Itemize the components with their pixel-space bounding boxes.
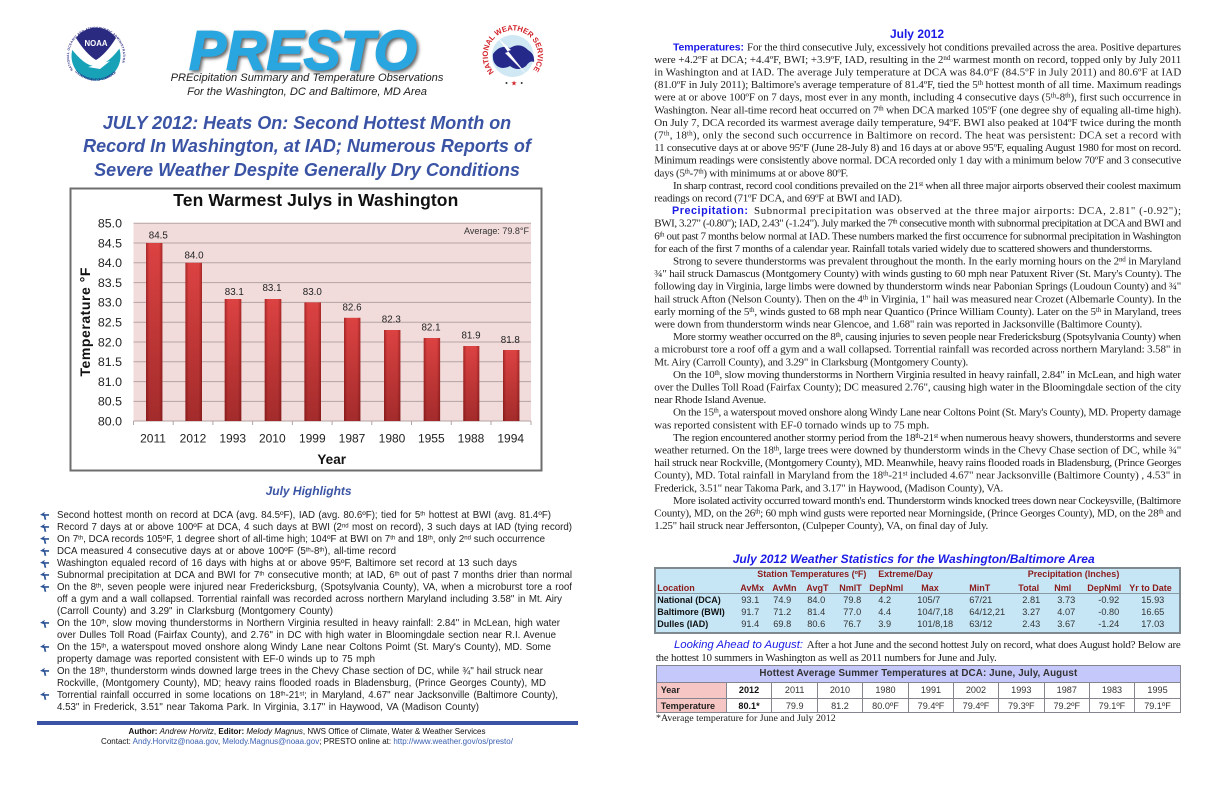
table: July 2012 weather statistics: -1.24 bbox=[1098, 619, 1119, 629]
heading: weather statistics: July 2012 Weather Statistics for the Washington/Baltimore Area bbox=[733, 552, 1095, 566]
table: hottest average summer temperatures: 1991 bbox=[921, 685, 941, 695]
x axis labels bbox=[140, 432, 524, 446]
table: July 2012 weather statistics: 79.8 bbox=[843, 595, 861, 605]
value labels: 83.0 bbox=[303, 287, 322, 298]
narrative: precipitation: Mt. Airy (Carroll County), and 3.29" in Clarksburg (Montgomery County). bbox=[654, 356, 969, 368]
table: July 2012 weather statistics: Baltimore (BWI) bbox=[657, 607, 725, 617]
text: looking ahead to August: After a hot June and the second hottest July on record, what does August hold? Below are bbox=[807, 639, 1181, 651]
highlights list: On the 10th, slow moving thunderstorms in Northern Virginia resulted in heavy rainfall: 2.84" in McLean, high water bbox=[57, 618, 560, 629]
narrative: precipitation: On the 10th, slow moving thunderstorms in Northern Virginia resulted in heavy rainfall, 2.84" in McLean, and high water bbox=[673, 369, 1181, 381]
table: hottest average summer temperatures: 1983 bbox=[1102, 685, 1122, 695]
highlights list: 4.53" in Frederick, 3.51" near Takoma Park. In Virginia, 3.17" in Haywood, VA (Madison County) bbox=[57, 702, 479, 713]
text: looking ahead to August: Looking Ahead to August: bbox=[674, 639, 803, 651]
table: hottest average summer temperatures: Hottest Average Summer Temperatures at DCA: June, July, August bbox=[759, 668, 1077, 679]
footer rule bbox=[37, 721, 578, 725]
x axis labels: 2012 bbox=[180, 432, 207, 446]
table: July 2012 weather statistics: Location bbox=[657, 583, 695, 593]
highlights list: On 7th, DCA records 105ºF, 1 degree short of all-time high; 104ºF at BWI on 7th and 18th, only 2nd such occurrence bbox=[57, 534, 545, 545]
highlights list: Record 7 days at or above 100ºF at DCA, 4 such days at BWI (2nd most on record), 3 such days at IAD (tying record) bbox=[57, 522, 572, 533]
narrative: temperatures: (81.0ºF in July 2011); Baltimore's average temperature of 81.4ºF, tied the 5th hottest month of all time. Maximum readings bbox=[654, 79, 1181, 91]
table: hottest average summer temperatures: 1980 bbox=[875, 685, 896, 695]
table: hottest average summer temperatures: 79.2ºF bbox=[1053, 701, 1080, 711]
average note: Average: 79.8°F bbox=[464, 226, 529, 236]
table: July 2012 weather statistics: 2.43 bbox=[1022, 619, 1040, 629]
table: July 2012 weather statistics: 67/21 bbox=[969, 595, 992, 605]
highlights list: Second hottest month on record at DCA (avg. 84.5ºF), IAD (avg. 80.6ºF); tied for 5th hottest at BWI (avg. 81.4ºF) bbox=[57, 510, 551, 521]
table: hottest average summer temperatures: Year bbox=[661, 685, 680, 695]
icon: NOAA logo: NOAA bbox=[85, 39, 108, 48]
narrative: precipitation bbox=[654, 205, 1182, 532]
heading: July 2012: July 2012 bbox=[890, 27, 944, 41]
table: July 2012 weather statistics: Max bbox=[921, 583, 939, 593]
narrative: precipitation: for each of the first 7 months of a calendar year. Rainfall totals varied widely due to scattered showers and thunderstorms. bbox=[654, 243, 1153, 255]
narrative: temperatures: Minimum readings were consistently above normal. DCA recorded only 1 day with a minimum below 70ºF and 3 consecutive bbox=[654, 155, 1181, 167]
table: July 2012 weather statistics: -0.92 bbox=[1098, 595, 1119, 605]
x axis labels: 1994 bbox=[497, 432, 524, 446]
narrative: temperatures: Temperatures: bbox=[673, 41, 744, 53]
table: hottest average summer temperatures: 2002 bbox=[966, 685, 986, 695]
table: hottest average summer temperatures bbox=[656, 665, 1181, 713]
y axis labels bbox=[98, 216, 122, 428]
table: July 2012 weather statistics: -0.80 bbox=[1098, 607, 1119, 617]
highlights list: property damage was reported consistent with EF-0 winds up to 75 mph bbox=[57, 654, 375, 665]
table: hottest average summer temperatures: 1993 bbox=[1011, 685, 1031, 695]
narrative: temperatures: On July 7, DCA recorded its warmest average daily temperature, 94ºF. BWI also peaked at 104ºF twice during the month bbox=[654, 117, 1182, 129]
table: hottest average summer temperatures: 1987 bbox=[1057, 685, 1077, 695]
table: July 2012 weather statistics: DepNml bbox=[869, 583, 903, 593]
narrative: precipitation: over the Dulles Toll Road (Fairfax County); DC measured 2.76", causing high water in the Bloomingdale section of the city bbox=[654, 382, 1182, 394]
narrative: precipitation: BWI, 3.27" (-0.80"); IAD, 2.43" (-1.24"). July marked the 7th consecutive month with subnormal precipitation at DCA and BWI and bbox=[654, 218, 1182, 230]
icon: National Weather Service logo: ★ bbox=[511, 80, 517, 88]
x axis title: Year bbox=[317, 452, 347, 467]
narrative: precipitation: Strong to severe thunderstorms was prevalent throughout the month. In the early morning hours on the 2nd in Maryland bbox=[673, 256, 1182, 268]
value labels: 81.9 bbox=[461, 330, 481, 342]
table: July 2012 weather statistics: NmlT bbox=[839, 583, 862, 593]
y axis labels: 83.0 bbox=[98, 296, 122, 310]
narrative: temperatures: readings on record (71ºF DCA, and 69ºF at BWI and IAD). bbox=[654, 192, 903, 204]
subtitle: PREcipitation Summary and Temperature Observations bbox=[171, 72, 443, 84]
icon: NOAA logo: U.S. DEPARTMENT OF COMMERCE bbox=[75, 70, 116, 81]
value labels: 83.1 bbox=[225, 287, 244, 298]
subtitle: For the Washington, DC and Baltimore, MD Area bbox=[187, 86, 427, 98]
table: hottest average summer temperatures: 79.1ºF bbox=[1144, 701, 1171, 711]
table: July 2012 weather statistics: 80.6 bbox=[807, 619, 825, 629]
value labels: 82.3 bbox=[382, 314, 401, 326]
highlights list: Subnormal precipitation at DCA and BWI for 7th consecutive month; at IAD, 6th out of past 7 months drier than normal bbox=[57, 570, 572, 581]
x axis labels: 1999 bbox=[299, 432, 326, 446]
narrative: precipitation: On the 15th, a waterspout moved onshore along Windy Lane near Coltons Point (St. Mary's County), MD. Property damage bbox=[673, 407, 1181, 419]
narrative: precipitation: Subnormal precipitation was observed at the three major airports: DCA, 2.81" (-0.92"); bbox=[754, 205, 1181, 217]
narrative text column bbox=[654, 41, 1182, 532]
table: July 2012 weather statistics: Precipitation (Inches) bbox=[1028, 569, 1119, 579]
narrative: temperatures: (7th, 18th), only the second such occurrence in Baltimore on record. The heat was persistent: DCA set a record with bbox=[654, 130, 1182, 142]
table: July 2012 weather statistics: 15.93 bbox=[1141, 595, 1164, 605]
narrative: precipitation: hail struck Afton (Nelson County). Then on the 4th in Virginia, 1" hail was measured near Crozet (Albemarle County). In the bbox=[654, 293, 1181, 305]
table: July 2012 weather statistics: 3.9 bbox=[878, 619, 891, 629]
table: July 2012 weather statistics: 3.73 bbox=[1057, 595, 1075, 605]
footer credits: Author: Andrew Horvitz, Editor: Melody Magnus, NWS Office of Climate, Water & Weather Services bbox=[129, 726, 485, 736]
y axis labels: 82.0 bbox=[98, 335, 122, 349]
table: July 2012 weather statistics: AvMx bbox=[740, 583, 764, 593]
heading: July Highlights: July Highlights bbox=[266, 484, 352, 498]
table: July 2012 weather statistics: 4.4 bbox=[878, 607, 891, 617]
value labels: 84.0 bbox=[184, 250, 204, 262]
highlights list: Washington equaled record of 16 days with highs at or above 95ºF, Baltimore set record at 13 such days bbox=[57, 558, 517, 569]
table: July 2012 weather statistics: 105/7 bbox=[917, 595, 940, 605]
x axis labels: 2010 bbox=[259, 432, 286, 446]
table: hottest average summer temperatures: 81.2 bbox=[831, 701, 849, 711]
narrative: precipitation: 6th out past 7 months below normal at IAD. These numbers marked the first occurrence for subnormal precipitation in Washington bbox=[654, 230, 1182, 242]
table: July 2012 weather statistics: 64/12,21 bbox=[969, 607, 1005, 617]
narrative: precipitation: Frederick, 3.51" near Takoma Park, and 3.17" in Haywood, (Madison County), VA. bbox=[654, 482, 1004, 494]
narrative: temperatures: were +4.2ºF at DCA; +4.4ºF, BWI; +3.9ºF, IAD, resulting in the 2nd warmest month on record, topped only by July 2011 bbox=[654, 54, 1181, 66]
x axis labels: 1987 bbox=[339, 432, 366, 446]
y axis labels: 80.0 bbox=[98, 414, 122, 428]
footer credits: Contact: Andy.Horvitz@noaa.gov, Melody.Magnus@noaa.gov; PRESTO online at: http://www.weather.gov/os/presto/ bbox=[101, 737, 513, 746]
value labels bbox=[149, 230, 520, 346]
bar chart: ten warmest Julys in Washington bbox=[70, 188, 542, 472]
x axis labels: 1993 bbox=[219, 432, 246, 446]
narrative: precipitation: County), MD. Total rainfall in Maryland from the 18th-21st included 4.67" near Jacksonville (Baltimore County) , 4.53" in bbox=[654, 470, 1182, 482]
title: Severe Weather Despite Generally Dry Conditions bbox=[94, 160, 520, 180]
table: July 2012 weather statistics: 63/12 bbox=[969, 619, 992, 629]
narrative: precipitation: More stormy weather occurred on the 8th, causing injuries to seven people near Fredericksburg (Spotsylvania County) when bbox=[673, 331, 1182, 343]
highlights list bbox=[40, 510, 572, 713]
highlights list: (Carroll County) and 3.29" in Clarksburg (Montgomery County) bbox=[57, 606, 333, 617]
x axis labels: 1988 bbox=[458, 432, 485, 446]
table: July 2012 weather statistics: 74.9 bbox=[773, 595, 791, 605]
x axis labels: 1955 bbox=[418, 432, 445, 446]
highlights list: On the 15th, a waterspout moved onshore along Windy Lane near Coltons Poimt (St. Mary's County), MD. Some bbox=[57, 642, 551, 653]
narrative: temperatures: 11 consecutive days at or above 95ºF (June 28-July 8) and 16 days at or above 95ºF, equaling August 1980 for most on record. bbox=[654, 142, 1182, 154]
table: July 2012 weather statistics: 3.67 bbox=[1057, 619, 1075, 629]
narrative: temperatures: Washington. Near all-time record heat occurred on 7th when DCA marked 105ºF (one degree shy of equaling all-time high). bbox=[654, 104, 1182, 116]
title bbox=[83, 113, 532, 180]
table: July 2012 weather statistics: MinT bbox=[969, 583, 990, 593]
highlights list: Rockville, (Montgomery County), MD; heavy rains flooded roads in Bladensburg, (Prince Georges County), MD bbox=[57, 678, 546, 689]
y axis labels: 85.0 bbox=[98, 216, 122, 230]
narrative: temperatures: For the third consecutive July, excessively hot conditions prevailed across the area. Positive departures bbox=[747, 41, 1181, 53]
highlights list: off a gym and a wall collapsed. Torrential rainfall was recorded across northern Maryland including 3.58" in Mt. Airy bbox=[57, 594, 562, 605]
table: July 2012 weather statistics: DepNml bbox=[1087, 583, 1121, 593]
table: July 2012 weather statistics: 16.65 bbox=[1141, 607, 1164, 617]
chart title: Ten Warmest Julys in Washington bbox=[173, 190, 458, 210]
highlights list: On the 8th, seven people were injured near Fredericksburg, (Spotsylvania County), VA, when a microburst tore a roof bbox=[57, 582, 572, 593]
y axis title: Temperature °F bbox=[77, 267, 93, 376]
y axis labels: 81.0 bbox=[98, 375, 122, 389]
table: July 2012 weather statistics: Yr to Date bbox=[1129, 583, 1172, 593]
highlights list: DCA measured 4 consecutive days at or above 100ºF (5th-8th), all-time record bbox=[57, 546, 396, 557]
title: Record In Washington, at IAD; Numerous Reports of bbox=[83, 136, 531, 156]
table: hottest average summer temperatures: 79.4ºF bbox=[963, 701, 989, 711]
table: hottest average summer temperatures: 80.0ºF bbox=[872, 701, 899, 711]
subtitle bbox=[171, 72, 444, 98]
table: hottest average summer temperatures: 2011 bbox=[785, 685, 804, 695]
table: July 2012 weather statistics: 4.2 bbox=[878, 595, 891, 605]
narrative: precipitation: The region encountered another stormy period from the 18th-21st when numerous heavy showers, thunderstorms and severe bbox=[673, 432, 1181, 444]
value labels: 84.5 bbox=[149, 230, 168, 242]
narrative: precipitation: ¾" hail struck Damascus (Montgomery County) with winds gusting to 60 mph near Patuxent River (St. Mary's County). The bbox=[654, 268, 1181, 280]
text: looking ahead to August bbox=[656, 639, 1181, 663]
narrative: temperatures bbox=[654, 41, 1182, 204]
table: hottest average summer temperatures: 80.1* bbox=[738, 701, 760, 711]
table: July 2012 weather statistics: 17.03 bbox=[1141, 619, 1164, 629]
table: July 2012 weather statistics: 71.2 bbox=[773, 607, 791, 617]
table: hottest average summer temperatures: Temperature bbox=[661, 701, 715, 711]
narrative: precipitation: Precipitation: bbox=[672, 205, 748, 217]
table: July 2012 weather statistics: 3.27 bbox=[1022, 607, 1040, 617]
table: July 2012 weather statistics: 93.1 bbox=[741, 595, 759, 605]
table: July 2012 weather statistics: 104/7,18 bbox=[917, 607, 953, 617]
table: July 2012 weather statistics: AvMn bbox=[772, 583, 796, 593]
narrative: precipitation: following day in Virginia, large limbs were downed by thunderstorm winds near Pabonian Springs (Loudoun County) and ¾" bbox=[654, 281, 1181, 293]
footer credits bbox=[101, 726, 513, 746]
table: hottest average summer temperatures: 79.1ºF bbox=[1099, 701, 1125, 711]
narrative: temperatures: were at or above 100ºF on 7 days, most ever in any month, including 4 consecutive days (5th-8th), first such occurrence in bbox=[654, 92, 1182, 104]
highlights list: Torrential rainfall occurred in some locations on 18th-21st; in Maryland, 4.67" near Jacksonville (Baltimore County), bbox=[57, 690, 558, 701]
y axis labels: 84.0 bbox=[98, 256, 122, 270]
table: July 2012 weather statistics: 101/8,18 bbox=[917, 619, 953, 629]
table: July 2012 weather statistics: 91.4 bbox=[741, 619, 759, 629]
narrative: precipitation: hail struck near Rockville, (Montgomery County), MD. Meanwhile, heavy rains flooded roads in Bladensburg, (Prince Georges bbox=[654, 457, 1181, 469]
table: July 2012 weather statistics: Dulles (IAD) bbox=[657, 619, 708, 629]
table: hottest average summer temperatures: 79.9 bbox=[786, 701, 804, 711]
y axis labels: 83.5 bbox=[98, 276, 122, 290]
table: July 2012 weather statistics: AvgT bbox=[806, 583, 828, 593]
highlights list: On the 18th, thunderstorm winds downed large trees in the Chevy Chase section of DC, while ¾" hail struck near bbox=[57, 666, 543, 677]
icon: National Weather Service logo: NATIONAL WEATHER SERVICE bbox=[482, 25, 544, 75]
narrative: precipitation: 1.25" hail struck near Jeffersonton, (Culpeper County), VA, on final day of July. bbox=[654, 520, 989, 532]
table: July 2012 weather statistics: 69.8 bbox=[773, 619, 791, 629]
y axis labels: 82.5 bbox=[98, 316, 122, 330]
narrative: precipitation: near Rhode Island Avenue. bbox=[654, 394, 767, 406]
table: hottest average summer temperatures: 2010 bbox=[830, 685, 850, 695]
highlights list: over Dulles Toll Road (Fairfax County), and 2.76" in DC with high water in Bloomingdale section near R.I. Avenue bbox=[57, 630, 556, 641]
table: hottest average summer temperatures: 1995 bbox=[1147, 685, 1168, 695]
table: July 2012 weather statistics: Total bbox=[1018, 583, 1039, 593]
table: July 2012 weather statistics: 2.81 bbox=[1022, 595, 1040, 605]
narrative: precipitation: was reported consistent with EF-0 tornado winds up to 75 mph. bbox=[654, 419, 930, 431]
value labels: 82.1 bbox=[421, 322, 441, 334]
x axis labels: 2011 bbox=[140, 432, 166, 446]
table: July 2012 weather statistics bbox=[654, 567, 1181, 634]
x axis labels: 1980 bbox=[379, 432, 406, 446]
table: July 2012 weather statistics: Extreme/Day bbox=[878, 569, 933, 579]
narrative: precipitation: More isolated activity occurred toward month's end. Thunderstorm winds knocked trees down near Cockeysville, (Baltimore bbox=[673, 495, 1181, 507]
value labels: 83.1 bbox=[262, 283, 282, 294]
table: July 2012 weather statistics: 91.7 bbox=[741, 607, 759, 617]
icon: NOAA logo: NATIONAL OCEANIC AND ATMOSPHERIC ADMINISTRATION bbox=[66, 26, 126, 71]
table: hottest average summer temperatures: 79.4ºF bbox=[918, 701, 944, 711]
y axis labels: 81.5 bbox=[98, 355, 122, 369]
narrative: temperatures: days (5th-7th) with minimums at or above 80ºF. bbox=[654, 167, 849, 179]
narrative: precipitation: County), MD, on the 26th; 60 mph wind gusts were reported near Morningside, (Prince Georges County), MD, on the 28th and bbox=[654, 508, 1182, 520]
table: hottest average summer temperatures: 2012 bbox=[739, 685, 759, 695]
narrative: precipitation: were down from thunderstorm winds near Glencoe, and 1.68" rain was reported in Jacksonville (Baltimore County). bbox=[654, 318, 1143, 330]
table: July 2012 weather statistics: National (DCA) bbox=[657, 595, 721, 605]
narrative: precipitation: a microburst tore a roof off a gym and a wall collapsed. Torrential rainfall was recorded across northern Maryland: 3.58" in bbox=[654, 344, 1182, 356]
table: July 2012 weather statistics: Nml bbox=[1054, 583, 1071, 593]
value labels: 82.6 bbox=[342, 302, 362, 314]
value labels: 81.8 bbox=[501, 335, 520, 346]
footnote: *Average temperature for June and July 2012 bbox=[656, 712, 836, 724]
table: July 2012 weather statistics: 77.0 bbox=[843, 607, 861, 617]
narrative: precipitation: weather returned. On the 18th, large trees were downed by thunderstorm winds in the Chevy Chase section of DC, while ¾" bbox=[654, 444, 1181, 456]
table: July 2012 weather statistics: 84.0 bbox=[807, 595, 825, 605]
narrative: temperatures: in Washington and at IAD. The average July temperature at DCA was 84.0ºF (84.5ºF in July 2011) and 80.6ºF at IAD bbox=[654, 66, 1181, 78]
table: July 2012 weather statistics: 81.4 bbox=[807, 607, 825, 617]
table: July 2012 weather statistics: Station Temperatures (ºF) bbox=[757, 569, 866, 579]
bars bbox=[146, 243, 519, 421]
y axis labels: 84.5 bbox=[98, 236, 122, 250]
table: July 2012 weather statistics: 4.07 bbox=[1057, 607, 1075, 617]
table: July 2012 weather statistics: 76.7 bbox=[843, 619, 861, 629]
table: hottest average summer temperatures: 79.3ºF bbox=[1008, 701, 1035, 711]
narrative: precipitation: early morning of the 5th, winds gusted to 68 mph near Quantico (Prince William County). Later on the 5th in Maryland, trees bbox=[654, 306, 1181, 318]
narrative: temperatures: In sharp contrast, record cool conditions prevailed on the 21st when all three major airports observed their coolest maximum bbox=[673, 180, 1181, 192]
title: JULY 2012: Heats On: Second Hottest Month on bbox=[103, 113, 511, 133]
y axis labels: 80.5 bbox=[98, 395, 122, 409]
